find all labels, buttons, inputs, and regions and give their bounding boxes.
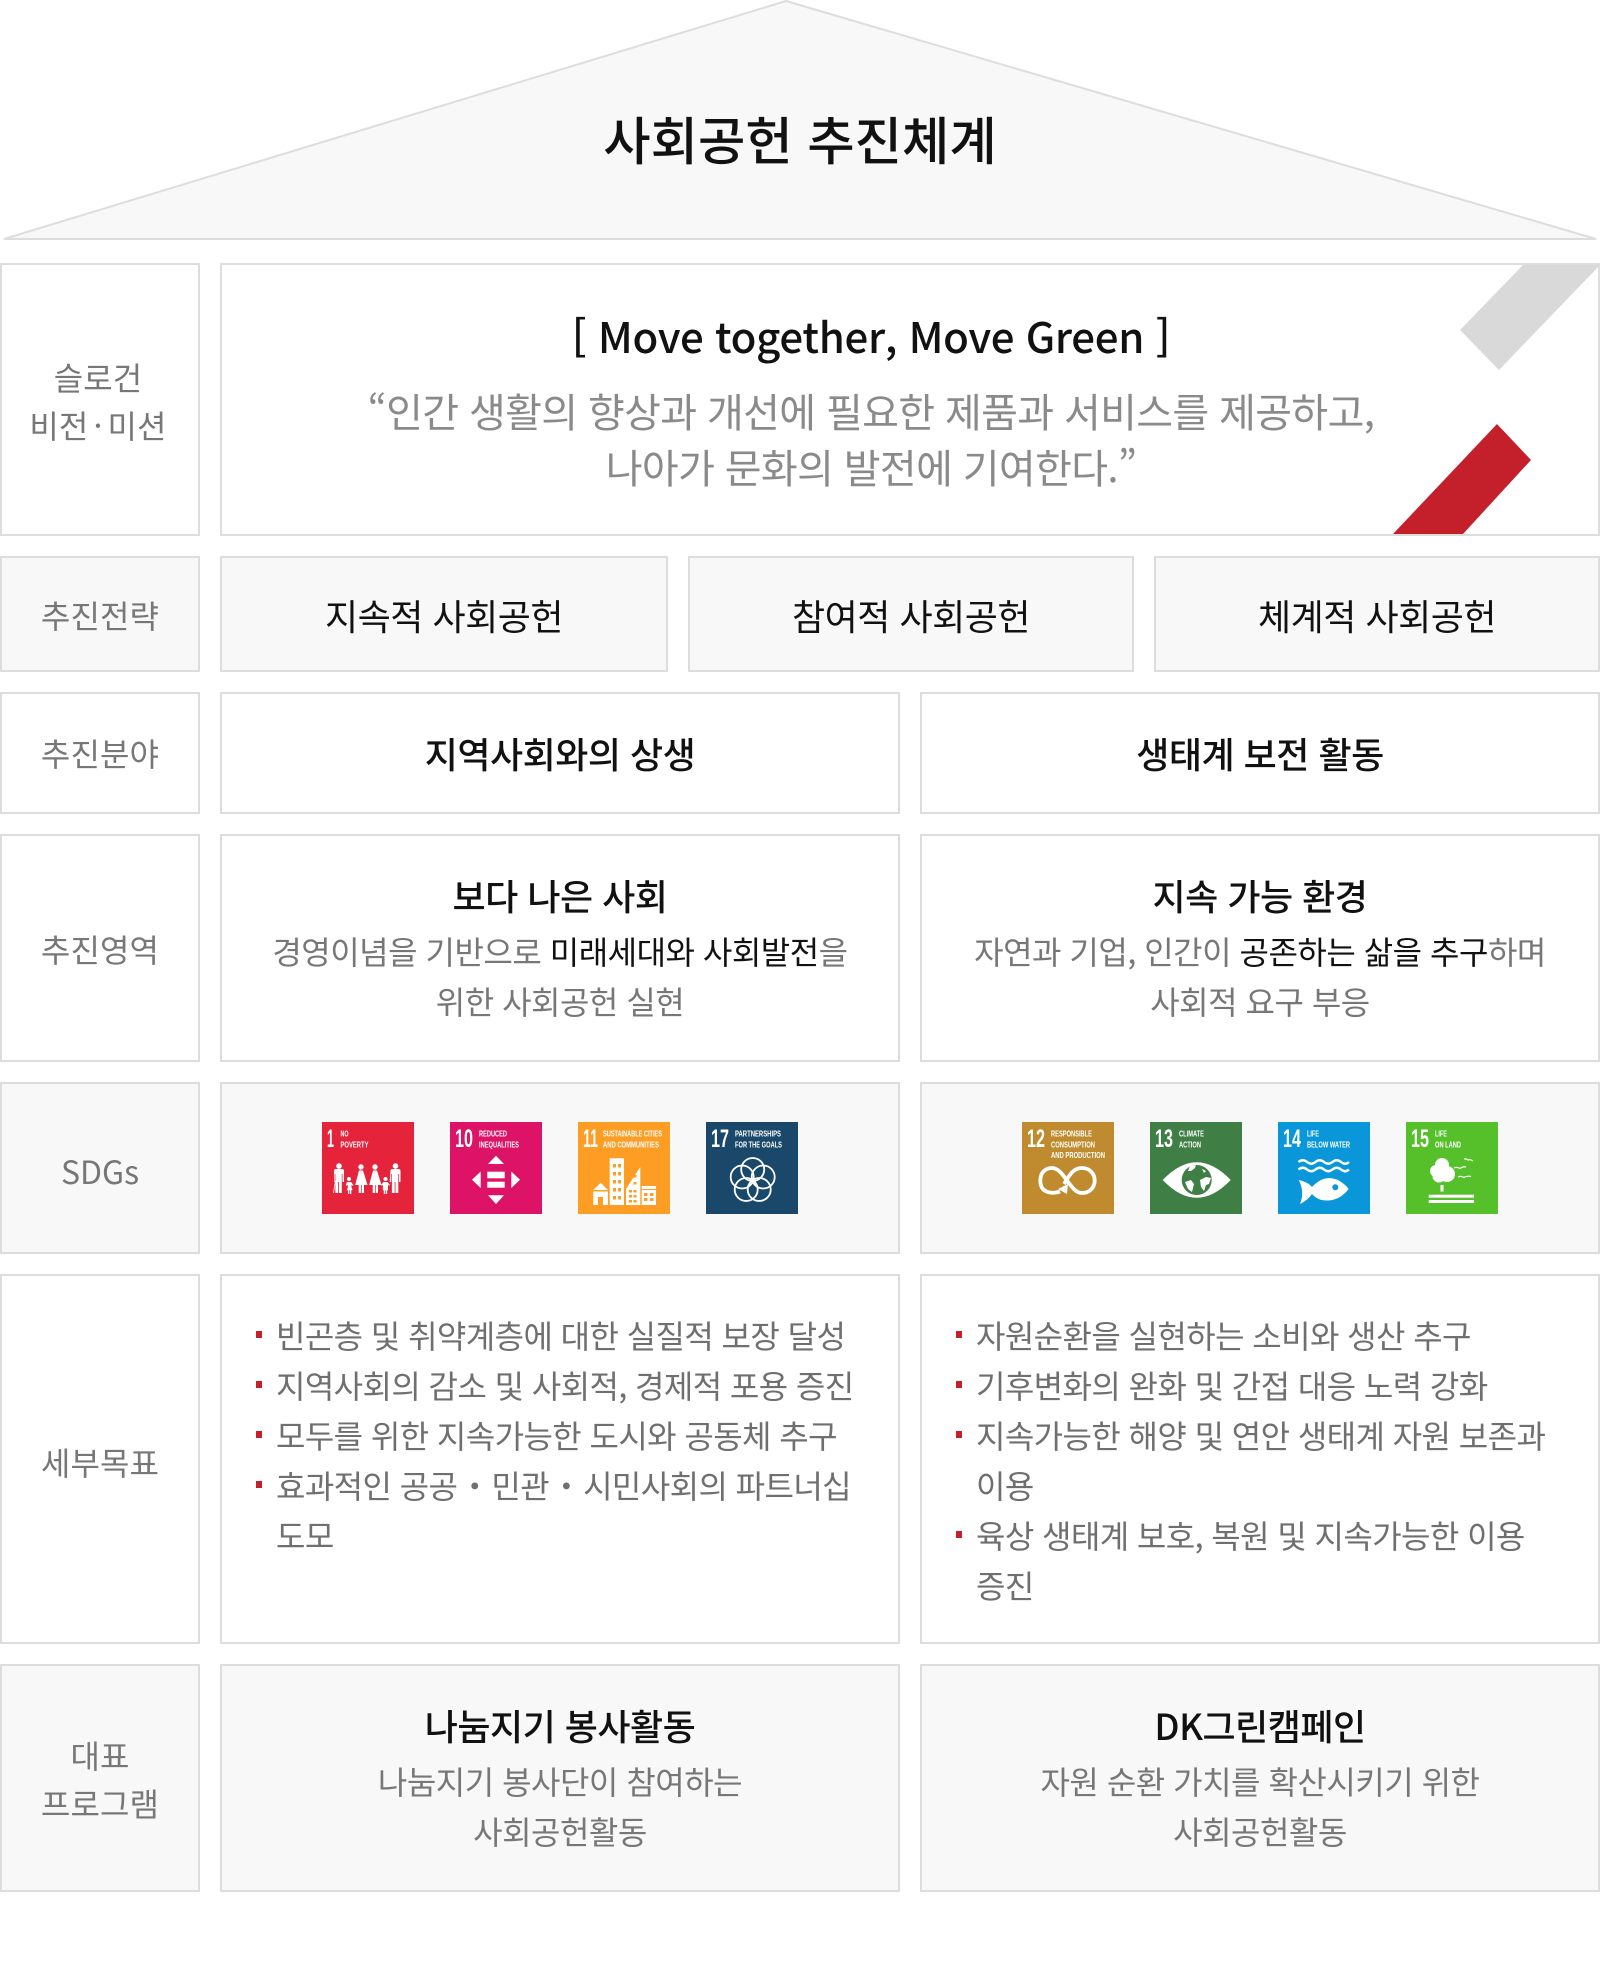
bullet list (256, 1312, 854, 1558)
label: program (0, 1664, 200, 1892)
area 2 (920, 834, 1600, 1062)
strategy 1 (220, 556, 668, 672)
bullet list: 도모 (276, 1512, 334, 1558)
icon: SDG 12 responsible consumption: RESPONSIBLE (1051, 1128, 1092, 1138)
bullet list: 육상 생태계 보호, 복원 및 지속가능한 이용 (976, 1512, 1525, 1558)
label: slogan vision mission (0, 263, 200, 536)
icon: SDG 1 no poverty: POVERTY (340, 1140, 369, 1150)
icon: SDG 14 life below water: BELOW WATER (1307, 1140, 1350, 1150)
icon: SDG 10 reduced inequalities: 10 (455, 1125, 473, 1153)
field 2 (920, 692, 1600, 814)
icon: SDG 13 climate action: CLIMATE (1179, 1128, 1204, 1138)
label: SDGs: SDGs (61, 1148, 139, 1194)
slogan heading: [ Move together, Move Green ] (572, 305, 1170, 366)
icon: SDG 11 sustainable cities (578, 1122, 670, 1214)
panel: slogan (220, 263, 1600, 536)
bullet list: 모두를 위한 지속가능한 도시와 공동체 추구 (276, 1412, 837, 1458)
area 1: 위한 사회공헌 실현 (436, 978, 684, 1024)
program 1: 나눔지기 봉사활동 (425, 1699, 695, 1751)
program 1: 나눔지기 봉사단이 참여하는 (378, 1758, 742, 1804)
panel: slogan: 나아가 문화의 발전에 기여한다.” (606, 437, 1136, 495)
label: area: 추진영역 (41, 926, 159, 972)
field 1: 지역사회와의 상생 (425, 727, 695, 779)
icon: SDG 1 no poverty: 1 (327, 1125, 334, 1153)
roof heading (4, 0, 1596, 240)
strategy 2: 참여적 사회공헌 (792, 589, 1030, 641)
icon: SDG 15 life on land: ON LAND (1435, 1140, 1461, 1150)
icon: SDG 14 life below water: 14 (1283, 1125, 1301, 1153)
icon: SDG 13 climate action: ACTION (1179, 1140, 1201, 1150)
area 2: 지속 가능 환경 (1153, 869, 1367, 921)
program 2: DK그린캠페인 (1154, 1699, 1366, 1751)
icon: SDG 14 life below water (1278, 1122, 1370, 1214)
icon: SDG 12 responsible consumption: CONSUMPTION (1051, 1140, 1095, 1150)
label: field: 추진분야 (41, 730, 159, 776)
label: program: 프로그램 (41, 1780, 159, 1826)
label: strategy (0, 556, 200, 672)
icon: SDG 15 life on land: LIFE (1435, 1128, 1447, 1138)
bullet list (956, 1312, 1545, 1608)
icon: SDG 1 no poverty (322, 1122, 414, 1214)
title: 사회공헌 추진체계 (603, 100, 997, 175)
panel: targets right (920, 1274, 1600, 1644)
bullet list: 빈곤층 및 취약계층에 대한 실질적 보장 달성 (276, 1312, 845, 1358)
icon: SDG 10 reduced inequalities: REDUCED (479, 1128, 507, 1138)
icon: SDG 10 reduced inequalities (450, 1122, 542, 1214)
program 1 (220, 1664, 900, 1892)
bullet list: 자원순환을 실현하는 소비와 생산 추구 (976, 1312, 1471, 1358)
roof shape (4, 0, 1596, 240)
label: targets: 세부목표 (41, 1439, 159, 1485)
icon: SDG 17 partnerships: 17 (711, 1125, 729, 1153)
panel: SDGs right (920, 1082, 1600, 1254)
area 1: 보다 나은 사회 (453, 869, 667, 921)
label: program: 대표 (70, 1732, 130, 1778)
strategy 2 (688, 556, 1134, 672)
bullet list: 증진 (976, 1562, 1034, 1608)
program 1: 사회공헌활동 (473, 1808, 647, 1854)
bullet list: 지역사회의 감소 및 사회적, 경제적 포용 증진 (276, 1362, 854, 1408)
icon: SDG 12 responsible consumption (1022, 1122, 1114, 1214)
icon: SDG 15 life on land: 15 (1411, 1125, 1429, 1153)
label: targets (0, 1274, 200, 1644)
slogan text: “인간 생활의 향상과 개선에 필요한 제품과 서비스를 제공하고, (368, 381, 1374, 439)
area 2: 사회적 요구 부응 (1150, 978, 1370, 1024)
label: slogan vision mission: 비전·미션 (29, 402, 167, 448)
label: field (0, 692, 200, 814)
bullet list: 효과적인 공공・민관・시민사회의 파트너십 (276, 1462, 851, 1508)
icon: SDG 13 climate action (1150, 1122, 1242, 1214)
label: area (0, 834, 200, 1062)
label: SDGs (0, 1082, 200, 1254)
icon: SDG 10 reduced inequalities: INEQUALITIES (479, 1140, 519, 1150)
icon: SDG 11 sustainable cities: 11 (583, 1125, 598, 1153)
program 2: 자원 순환 가치를 확산시키기 위한 (1040, 1758, 1480, 1804)
program 2: 사회공헌활동 (1173, 1808, 1347, 1854)
panel: targets left (220, 1274, 900, 1644)
strategy 1: 지속적 사회공헌 (325, 589, 563, 641)
label: strategy: 추진전략 (41, 592, 159, 638)
strategy 3: 체계적 사회공헌 (1258, 589, 1496, 641)
bullet list: 지속가능한 해양 및 연안 생태계 자원 보존과 (976, 1412, 1545, 1458)
icon: SDG 1 no poverty: NO (340, 1128, 349, 1138)
strategy 3 (1154, 556, 1600, 672)
bullet list: 이용 (976, 1462, 1034, 1508)
area 1: 경영이념을 기반으로 미래세대와 사회발전을 (272, 928, 848, 974)
icon: SDG 12 responsible consumption: 12 (1027, 1125, 1045, 1153)
icon: SDG 14 life below water: LIFE (1307, 1128, 1319, 1138)
area 1 (220, 834, 900, 1062)
bullet list: 기후변화의 완화 및 간접 대응 노력 강화 (976, 1362, 1488, 1408)
area 2: 자연과 기업, 인간이 공존하는 삶을 추구하며 (974, 928, 1546, 974)
icon: SDG 15 life on land (1406, 1122, 1498, 1214)
field 2: 생태계 보전 활동 (1136, 727, 1384, 779)
field 1 (220, 692, 900, 814)
panel: SDGs left (220, 1082, 900, 1254)
ribbon decoration (1393, 265, 1598, 534)
program 2 (920, 1664, 1600, 1892)
label: slogan vision mission: 슬로건 (54, 354, 142, 400)
icon: SDG 17 partnerships (706, 1122, 798, 1214)
icon: SDG 13 climate action: 13 (1155, 1125, 1173, 1153)
